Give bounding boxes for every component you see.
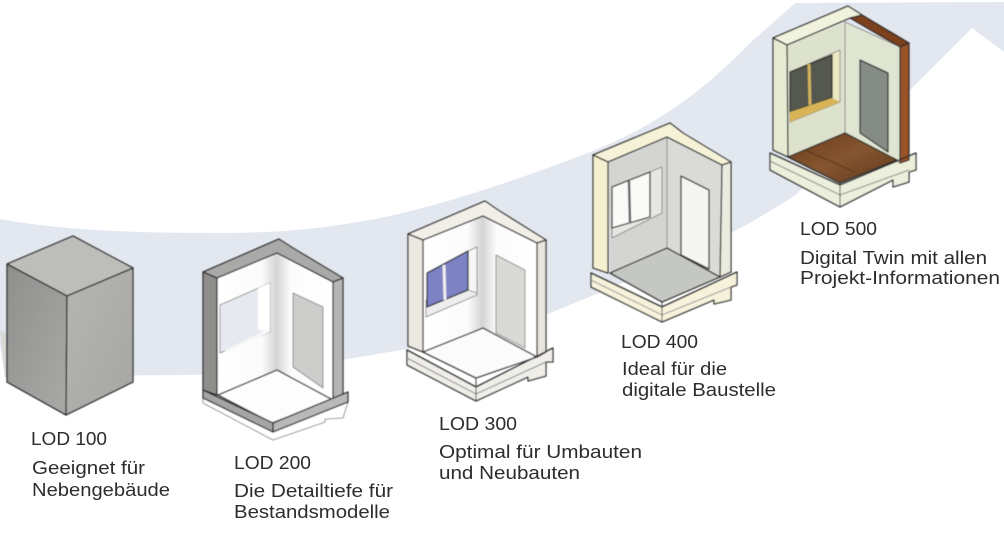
LOD 200 caption: LOD 200 [234,453,311,473]
LOD 300 caption: und Neubauten [439,463,580,483]
LOD 100 caption: LOD 100 [31,429,107,449]
LOD 400 caption: Ideal für die [622,359,727,379]
LOD 400 caption: LOD 400 [621,332,698,352]
LOD 500 building: digital twin with materials [770,6,916,207]
LOD 100 building: solid block [7,236,133,415]
LOD 100 caption: Nebengebäude [32,480,170,500]
LOD 200 caption [234,453,393,522]
LOD 500 caption [800,219,1000,288]
LOD 500 caption: LOD 500 [800,219,877,239]
LOD 300 caption: LOD 300 [439,414,517,434]
LOD 300 building: window and door [407,201,553,401]
LOD 500 caption: Projekt-Informationen [800,268,1000,288]
background curved arrow band [0,2,1004,377]
LOD 300 caption [439,414,642,483]
LOD 100 caption [31,429,170,500]
LOD 500 caption: Digital Twin mit allen [800,248,987,268]
LOD 200 building: grey shell [203,239,348,440]
LOD 400 caption [621,332,776,400]
LOD 200 caption: Bestandsmodelle [234,502,390,522]
LOD 300 caption: Optimal für Umbauten [439,442,642,462]
LOD 400 caption: digitale Baustelle [622,380,776,400]
LOD 100 caption: Geeignet für [32,458,145,478]
LOD 400 building: detailed grey interior [591,123,737,322]
LOD 200 caption: Die Detailtiefe für [234,481,393,501]
faint wedge at band tail [0,330,20,377]
